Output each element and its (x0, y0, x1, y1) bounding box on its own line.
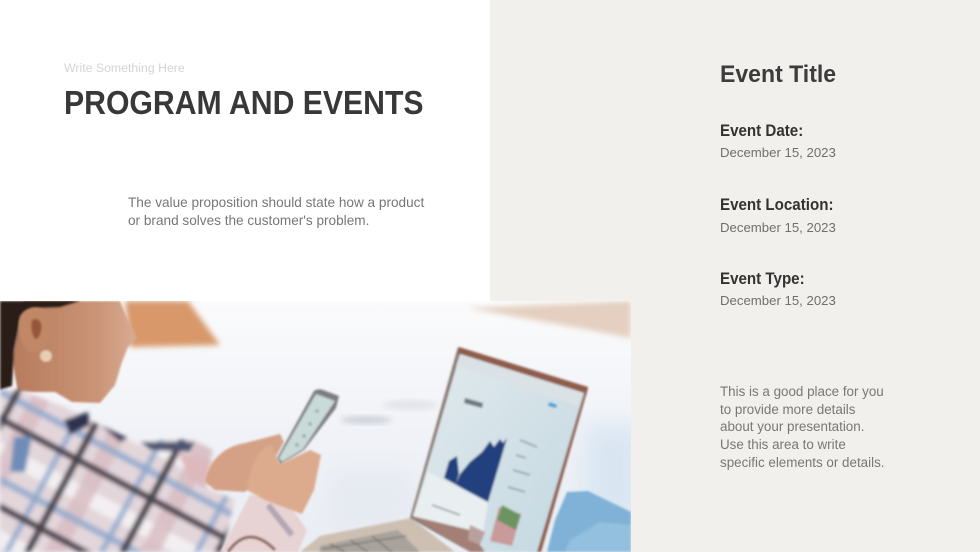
phone (277, 389, 339, 465)
details paragraph: This is a good place for you (720, 384, 884, 399)
event date value: December 15, 2023 (720, 145, 836, 160)
shirt (0, 390, 235, 552)
details paragraph: specific elements or details. (720, 455, 884, 470)
details paragraph: Use this area to write (720, 437, 846, 452)
jeans (547, 491, 631, 552)
hands (205, 434, 321, 514)
details paragraph (720, 384, 884, 470)
laptop base (300, 518, 455, 552)
inner ear (31, 319, 41, 339)
event type: Event Type: (720, 269, 805, 288)
sleeve on arm (220, 495, 307, 552)
dashboard chart (444, 438, 507, 502)
event location: Event Location: (720, 195, 833, 214)
value proposition text (128, 195, 424, 228)
event type value: December 15, 2023 (720, 293, 836, 308)
keyboard (320, 530, 420, 552)
event title: Event Title (720, 61, 836, 88)
bed shadows (330, 400, 645, 530)
earring (40, 350, 52, 362)
details paragraph: about your presentation. (720, 419, 864, 434)
title: PROGRAM AND EVENTS (64, 84, 424, 121)
value proposition text: The value proposition should state how a product (128, 195, 424, 210)
value proposition text: or brand solves the customer's problem. (128, 213, 369, 228)
small eyebrow text: Write Something Here (64, 61, 185, 75)
bed background (0, 301, 631, 552)
laptop screen (410, 347, 588, 552)
woman face and neck (12, 301, 137, 403)
event date: Event Date: (720, 121, 803, 140)
woman hair (0, 301, 80, 390)
photo: woman with phone and laptop (0, 301, 631, 552)
ear (19, 307, 52, 352)
panel: event details background (490, 0, 980, 552)
details paragraph: to provide more details (720, 402, 855, 417)
event location value: December 15, 2023 (720, 220, 836, 235)
headboard (468, 301, 631, 338)
orange pillow (125, 301, 220, 347)
